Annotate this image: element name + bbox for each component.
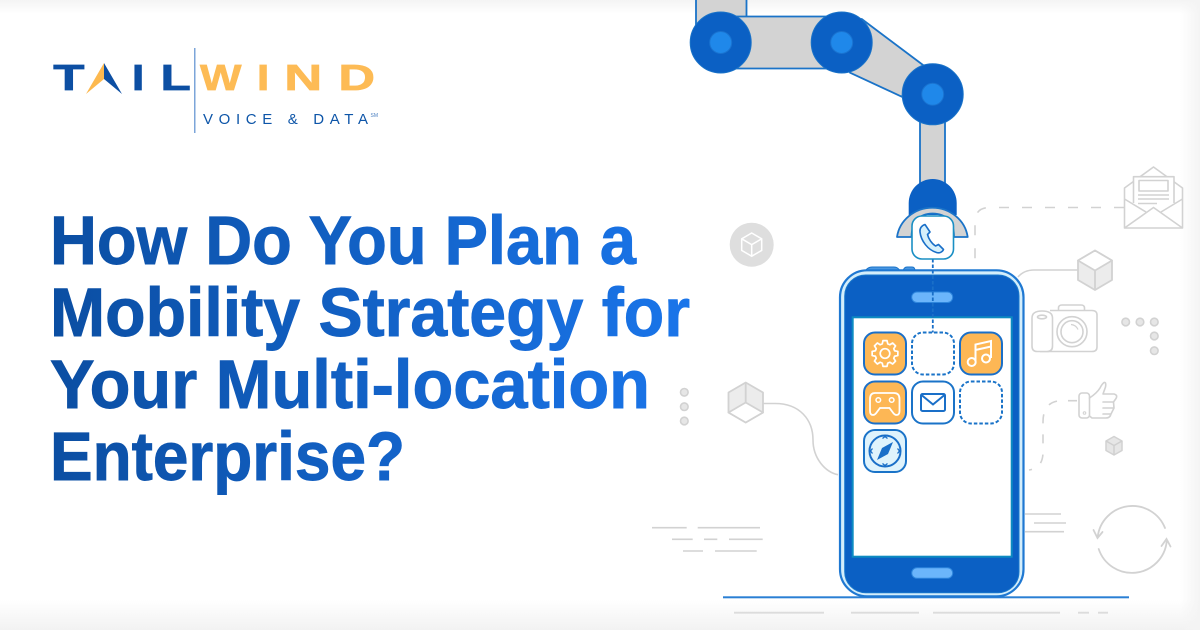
icon: small cube	[1106, 436, 1122, 455]
connector: dashed line to envelope	[975, 208, 1124, 262]
icon: thumbs up	[1079, 382, 1117, 418]
connector: left cube to phone	[763, 404, 838, 475]
ground lines	[723, 596, 1129, 613]
joints	[690, 12, 963, 125]
logo: Tailwind Voice & Data: N	[284, 57, 322, 98]
gray background icons and connectors	[652, 167, 1182, 573]
app: empty slot middle	[960, 382, 1002, 424]
icon: dots left	[680, 388, 688, 425]
icon: dots upper right	[1122, 318, 1158, 355]
app: mail	[912, 382, 954, 424]
connector: dashed line to thumb	[1029, 401, 1077, 470]
app: settings	[864, 332, 906, 374]
speaker top	[912, 292, 953, 302]
icon: gray circle with cube	[730, 223, 774, 267]
screen	[853, 317, 1012, 557]
lines right of phone	[1025, 514, 1066, 532]
logo: Tailwind Voice & Data: SM	[370, 113, 378, 119]
logo: Tailwind Voice & Data: I	[257, 57, 269, 98]
logo: Tailwind Voice & Data: I	[132, 57, 144, 98]
logo: Tailwind Voice & Data: W	[200, 58, 242, 98]
logo: Tailwind Voice & Data: D	[338, 58, 375, 98]
heading	[50, 202, 690, 495]
phone top buttons	[865, 267, 915, 271]
app: game controller	[864, 382, 906, 424]
app: music	[960, 332, 1002, 374]
icon: envelope	[1124, 167, 1182, 228]
dashed line from gripper to slot	[932, 259, 934, 332]
heading: Mobility Strategy for	[50, 274, 690, 351]
icon: left cube	[728, 382, 763, 422]
phone	[840, 259, 1024, 596]
logo: Tailwind Voice & Data: VOICE & DATA	[203, 111, 368, 128]
robotic arm	[690, 0, 968, 237]
gripper	[897, 179, 968, 237]
heading: Your Multi-location	[50, 346, 650, 423]
heading: Enterprise?	[50, 418, 405, 495]
logo: Tailwind Voice & Data: L	[160, 58, 191, 98]
app: compass	[864, 430, 906, 472]
icon: camera	[1032, 305, 1097, 352]
connector: phone to top cube	[1018, 270, 1078, 277]
logo: Tailwind Voice & Data	[53, 48, 378, 133]
icon: sync arrows	[1094, 506, 1170, 573]
lines left of phone	[652, 528, 763, 551]
icon: phone app held by gripper	[912, 216, 954, 259]
logo: Tailwind Voice & Data: T	[53, 58, 84, 98]
icon: top cube	[1078, 250, 1112, 290]
home button	[912, 568, 953, 578]
app: empty slot top	[912, 332, 954, 374]
heading: How Do You Plan a	[50, 202, 637, 279]
